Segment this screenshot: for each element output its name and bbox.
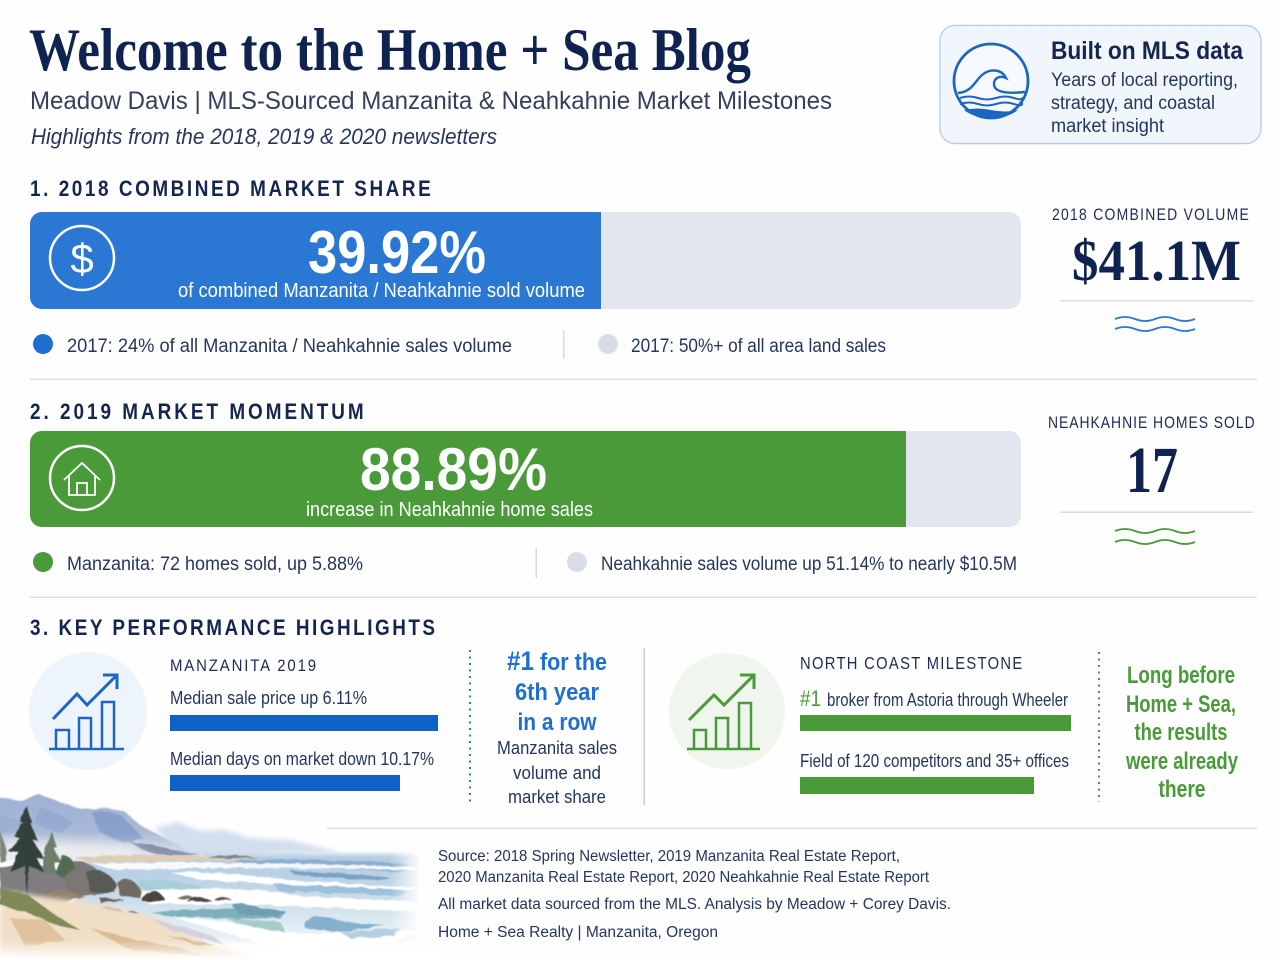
section heading 3: 3. KEY PERFORMANCE HIGHLIGHTS [30, 616, 435, 640]
subtitle: Meadow Davis | MLS-Sourced Manzanita & Neahkahnie Market Milestones [30, 87, 832, 115]
foam bands [90, 863, 420, 952]
footer: sources and credits: 2020 Manzanita Real Estate Report, 2020 Neahkahnie Real Estate Report [438, 869, 930, 886]
panel: North Coast milestone [800, 654, 1071, 794]
callout: long before Home + Sea: were already [1125, 748, 1238, 775]
callout: #1 for the 6th year: volume and [513, 763, 601, 783]
breaking waves [150, 904, 400, 938]
fade edges [390, 848, 422, 948]
panel: 2018 market share bar [30, 212, 1021, 309]
icon: house [50, 446, 114, 510]
callout: #1 for the 6th year: #1 for the [507, 646, 607, 676]
panel: North Coast milestone: Field of 120 competitors and 35+ offices [800, 751, 1069, 771]
callout: long before Home + Sea: the results [1134, 719, 1228, 746]
sea [75, 854, 420, 942]
icon: wave [954, 44, 1028, 118]
pine trees [0, 805, 75, 896]
headland strip of sand [75, 855, 258, 863]
panel: North Coast milestone: broker from Astoria through Wheeler [827, 690, 1068, 710]
stat: Neahkahnie homes sold: NEAHKAHNIE HOMES SOLD [1048, 414, 1255, 432]
deep water bands [136, 860, 410, 896]
callout: long before Home + Sea: Home + Sea, [1126, 691, 1236, 718]
sand shadows [10, 918, 225, 956]
callout: built on MLS data [940, 26, 1261, 144]
panel: Manzanita 2019 [170, 657, 438, 791]
stat: 2018 combined volume: $41.1M [1072, 228, 1241, 293]
footer: sources and credits [438, 848, 951, 941]
value: 39.92% [308, 219, 486, 286]
italic tagline: Highlights from the 2018, 2019 & 2020 newsletters [31, 124, 497, 149]
footer: sources and credits: All market data sourced from the MLS. Analysis by Meadow + Corey Davis. [438, 896, 951, 913]
callout: long before Home + Sea [1125, 662, 1238, 803]
panel: Manzanita 2019: Median sale price up 6.11% [170, 688, 367, 708]
icon: blue waves [1115, 317, 1195, 331]
rocks [0, 861, 232, 913]
icon: green growth chart [669, 653, 785, 769]
callout: long before Home + Sea: Long before [1127, 662, 1235, 689]
legend: Manzanita homes sold: Manzanita: 72 homes sold, up 5.88% [67, 554, 363, 575]
callout text: Years of local reporting, [1051, 70, 1238, 91]
callout: #1 for the 6th year: market share [508, 787, 606, 807]
footer: sources and credits: Home + Sea Realty | Manzanita, Oregon [438, 924, 718, 941]
bar caption: of combined Manzanita / Neahkahnie sold volume [178, 280, 585, 302]
callout: #1 for the 6th year [497, 646, 617, 807]
panel: North Coast milestone: #1 [800, 686, 821, 711]
dune grass [0, 888, 80, 930]
panel: North Coast milestone: NORTH COAST MILESTONE [800, 654, 1022, 673]
stat: Neahkahnie homes sold: 17 [1126, 434, 1178, 507]
legend: 2017 land sales: 2017: 50%+ of all area land sales [631, 336, 886, 357]
panel: Manzanita 2019: MANZANITA 2019 [170, 657, 316, 675]
callout: #1 for the 6th year: in a row [518, 709, 597, 736]
legend: 2017 sales volume: 2017: 24% of all Manzanita / Neahkahnie sales volume [67, 336, 512, 357]
callout text [1051, 37, 1244, 137]
icon: green waves [1115, 529, 1195, 544]
callout text: market insight [1051, 116, 1165, 137]
title: Welcome to the Home + Sea Blog [29, 17, 751, 83]
callout: #1 for the 6th year: Manzanita sales [497, 738, 617, 758]
stat: 2018 combined volume: 2018 COMBINED VOLUME [1052, 206, 1249, 224]
legend: Neahkahnie sales volume: Neahkahnie sales volume up 51.14% to nearly $10.5M [601, 554, 1017, 575]
callout text: strategy, and coastal [1051, 93, 1215, 114]
panel: Manzanita 2019: Median days on market down 10.17% [170, 749, 434, 769]
callout: #1 for the 6th year: 6th year [515, 679, 599, 706]
callout: long before Home + Sea: there [1158, 776, 1206, 803]
bar caption: increase in Neahkahnie home sales [306, 499, 593, 521]
stat: 2018 combined volume [1052, 206, 1253, 331]
main mountain [0, 795, 212, 862]
footer: sources and credits: Source: 2018 Spring Newsletter, 2019 Manzanita Real Estate Report, [438, 848, 900, 865]
icon: dollar: $ [70, 235, 94, 282]
scene: watercolor coastal landscape [0, 795, 440, 960]
distant mountains [155, 822, 340, 856]
section heading 1: 1. 2018 COMBINED MARKET SHARE [30, 177, 431, 201]
stat: Neahkahnie homes sold [1048, 414, 1255, 544]
section heading 2: 2. 2019 MARKET MOMENTUM [30, 400, 364, 424]
sand [0, 890, 255, 960]
icon: dollar [50, 226, 114, 290]
panel: 2019 momentum bar [30, 431, 1021, 527]
callout text: Built on MLS data [1051, 37, 1244, 65]
value: 88.89% [360, 436, 547, 503]
icon: blue growth chart [29, 652, 147, 770]
